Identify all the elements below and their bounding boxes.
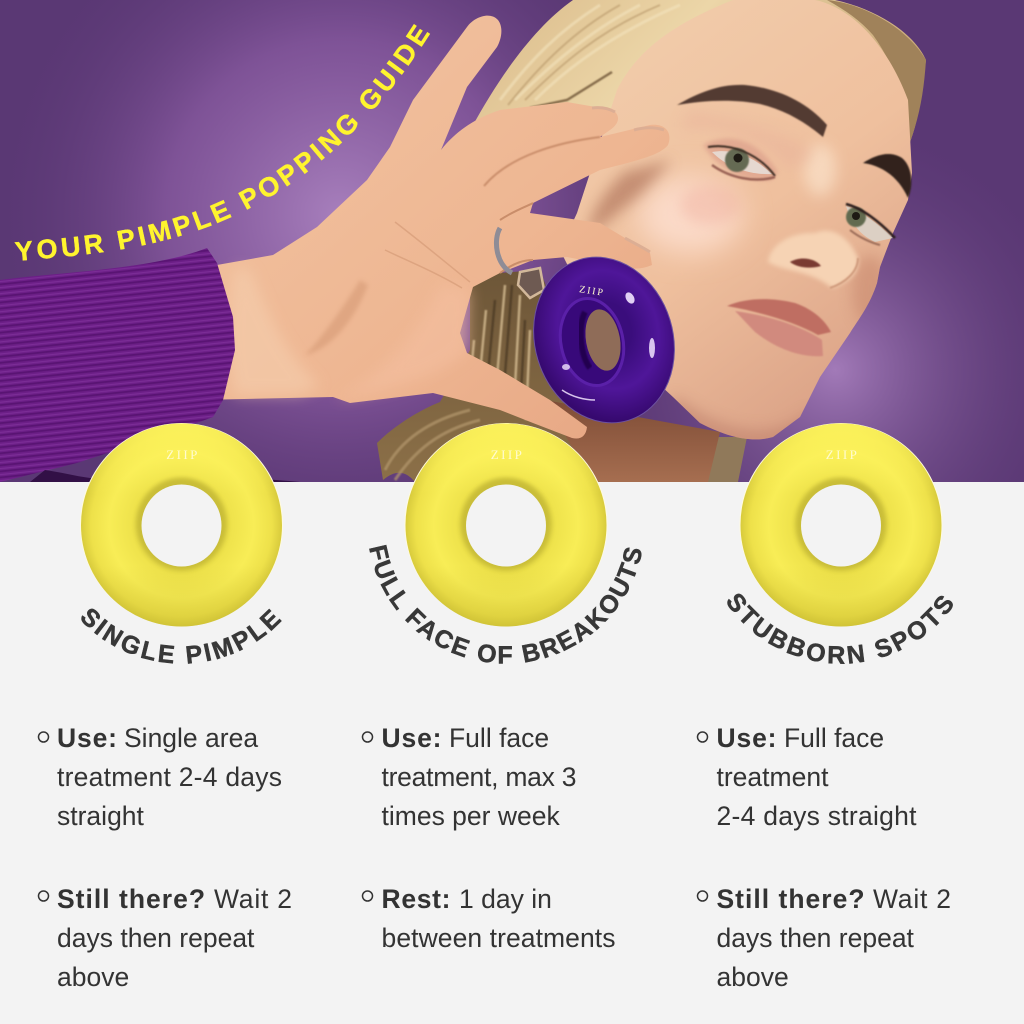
face [560,0,912,450]
label: single pimple: SINGLE PIMPLE [81,608,282,664]
hair [377,0,926,482]
instructions 3: days then repeat [716,923,915,953]
yellow ring 1 [80,423,283,626]
finger and palm shading [229,108,664,400]
column 3: stubborn spots [696,423,953,992]
instructions 1: Single area [124,723,258,753]
instructions 1 [38,723,292,992]
instructions 2 [362,723,616,953]
instructions 2: Full face [449,723,549,753]
instructions 1: days then repeat [57,923,255,953]
ring brand mark: ZIIP [491,447,524,462]
instructions 1: Wait 2 [214,884,292,914]
ring brand mark: ZIIP [826,447,859,462]
instructions 3 [698,723,951,992]
instructions 2: between treatments [382,923,616,953]
column 1: single pimple [38,423,292,992]
purple gradient backdrop [0,0,1024,482]
nose [768,231,858,288]
right eye [846,204,895,245]
instructions 3: Full face [784,723,884,753]
left eye [703,138,778,180]
neck [545,400,720,482]
bullet [38,732,48,742]
instructions 1: Still there? [57,884,205,914]
instructions 3: 2-4 days straight [716,801,917,831]
instructions 1: straight [57,801,145,831]
jewelry: earring [518,268,544,298]
yellow ring 3 [740,423,942,626]
yellow ring 2 [404,423,608,626]
bullet [362,891,372,901]
label: stubborn spots: STUBBORN SPOTS [727,594,953,664]
lips [727,299,831,356]
bullet [38,891,48,901]
instructions 1: Use: [57,723,117,753]
instructions 1: above [57,962,129,992]
bullet [362,732,372,742]
instructions 2: treatment, max 3 [382,762,576,792]
instructions 2: Rest: [382,884,450,914]
title: curved headline: YOUR PIMPLE POPPING GUIDE [14,24,430,261]
instructions 1: treatment 2-4 days [57,762,282,792]
instructions 2: times per week [382,801,560,831]
eyebrows [677,85,911,198]
instructions 3: Wait 2 [873,884,951,914]
bullet [698,732,708,742]
ring brand mark: ZIIP [166,447,200,462]
instructions 3: Still there? [716,884,864,914]
hand [200,16,669,439]
column 2: full face of breakouts [362,423,642,953]
purple sleeve [0,248,300,482]
instructions 3: treatment [716,762,829,792]
ring on finger [496,228,512,273]
instructions 3: Use: [716,723,776,753]
instructions 2: 1 day in [459,884,552,914]
label: full face of breakouts: FULL FACE OF BREAKOUTS [369,544,642,664]
bullet [698,891,708,901]
instructions 2: Use: [382,723,442,753]
ring brand mark: ZIIP [578,284,605,299]
instructions 3: above [716,962,789,992]
photo panel: woman holding purple ring [0,0,1024,482]
purple ring product [533,256,675,424]
